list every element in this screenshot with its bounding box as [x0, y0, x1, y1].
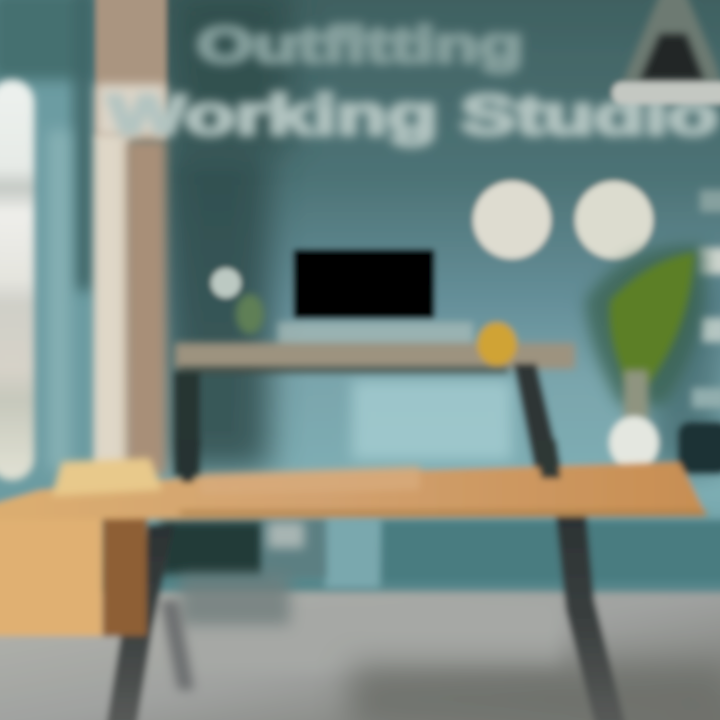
large plant and vase [585, 245, 720, 474]
leg left back [160, 600, 194, 690]
upper shelf [175, 343, 575, 374]
leg right [556, 515, 626, 720]
leg left [106, 525, 174, 720]
shelf supports [174, 364, 562, 476]
wall base under desk [160, 518, 720, 625]
shelf support tips over desk [176, 440, 560, 482]
drawer cabinet [0, 512, 147, 636]
floor [0, 592, 720, 720]
left wall and window [0, 0, 95, 530]
small plant on shelf [211, 268, 264, 334]
wall clocks [473, 181, 653, 259]
title line 2: Working Studio [108, 83, 718, 146]
vase [609, 416, 659, 470]
yellow object on shelf [477, 322, 517, 366]
desktop [0, 462, 706, 520]
dark object [678, 422, 720, 474]
title line 1: Outfitting [197, 17, 523, 73]
clock left [473, 181, 551, 259]
title [108, 17, 718, 146]
pendant lamp [612, 0, 720, 104]
desk legs [106, 515, 626, 720]
pillar [94, 0, 166, 475]
cream object on desk [52, 458, 162, 496]
monitor [278, 249, 473, 346]
right wall items [692, 190, 720, 408]
clock right [575, 181, 653, 259]
